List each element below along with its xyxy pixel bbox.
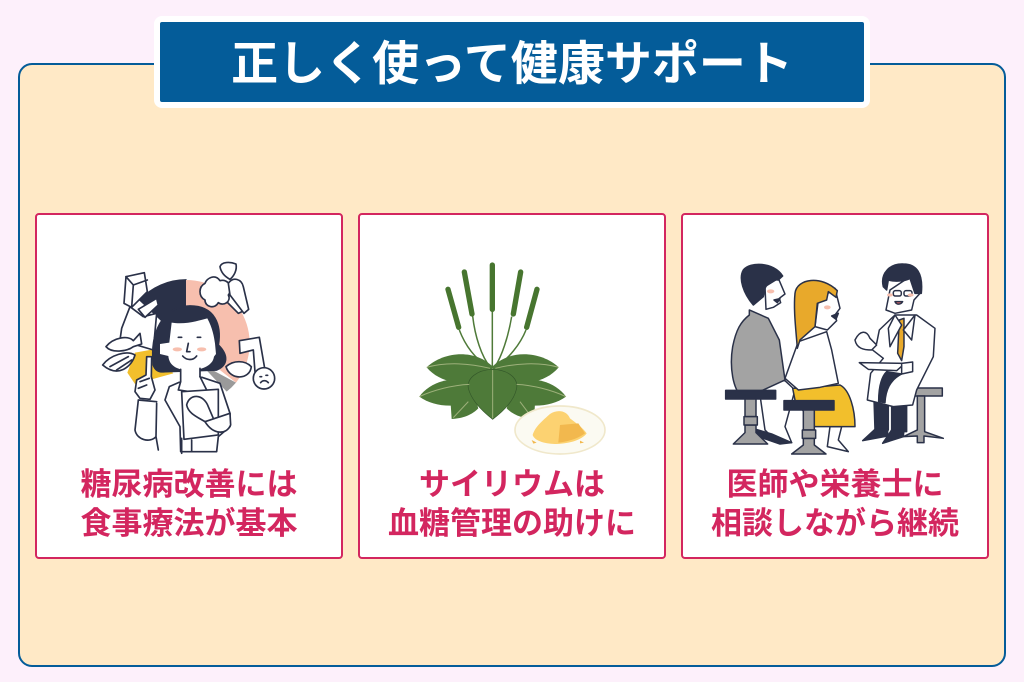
hair: [153, 306, 226, 372]
dish: [515, 406, 605, 454]
doctor's stool: [903, 388, 943, 443]
woman: [785, 280, 855, 452]
panel: consultation: [681, 213, 989, 559]
woman's stool: [784, 401, 834, 454]
sleeve: [135, 400, 158, 450]
icon: dietitian with food pie chart: [103, 262, 275, 453]
man: [731, 264, 795, 444]
heading: consultation: [711, 467, 959, 540]
broccoli: [225, 292, 247, 313]
icon: couple consulting a doctor: [726, 264, 943, 454]
panel: diet therapy: [35, 213, 343, 559]
panel: psyllium: [358, 213, 666, 559]
powder: [533, 411, 587, 444]
seed spikes: [448, 265, 537, 327]
heading: psyllium: [388, 467, 636, 540]
heading: diet therapy: [80, 467, 298, 540]
heading: consultation: 医師や栄養士に: [726, 467, 944, 502]
heading: diet therapy: 食事療法が基本: [80, 506, 298, 540]
title: 正しく使って健康サポート: [231, 37, 793, 90]
hand and pen: [135, 357, 155, 399]
coat: [165, 368, 230, 452]
clipboard: [182, 389, 218, 439]
leaf veins: [419, 364, 566, 418]
heading: diet therapy: 糖尿病改善には: [80, 467, 298, 502]
man's stool: [726, 390, 776, 444]
white coat: [867, 315, 935, 407]
face: [160, 318, 216, 371]
leaves: [419, 354, 566, 419]
icon: psyllium plant and powder dish: [419, 265, 605, 454]
plant stems: [459, 310, 526, 368]
heading: consultation: 相談しながら継続: [711, 506, 959, 540]
heading: psyllium: サイリウムは: [419, 467, 605, 502]
title: [154, 16, 870, 108]
doctor: [855, 264, 935, 443]
heading: psyllium: 血糖管理の助けに: [388, 506, 636, 540]
